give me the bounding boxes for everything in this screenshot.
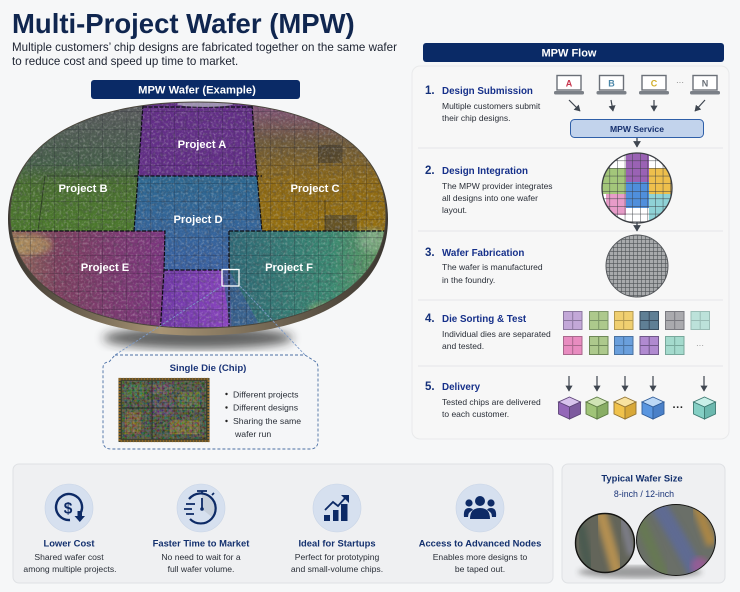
step 4 text: and tested. (442, 341, 484, 351)
region: Project F (229, 231, 384, 326)
step 3 text: 3. (425, 247, 435, 259)
step 2 wafer layout (600, 150, 675, 226)
die highlight square (222, 270, 239, 286)
wafer illustration (0, 95, 400, 349)
panel: typical wafer size: Typical Wafer Size (601, 472, 683, 484)
step 1 laptops: C (651, 78, 658, 88)
title: Multi-Project Wafer (MPW) (12, 8, 355, 39)
benefit: startups: Perfect for prototyping (295, 552, 379, 562)
benefit: faster time (153, 484, 249, 574)
benefit: faster time: Faster Time to Market (153, 538, 249, 548)
step 1 laptops (554, 76, 720, 94)
step 4 text: 4. (425, 313, 435, 325)
icon: dollar: $ (64, 500, 73, 518)
region: Project B (10, 106, 142, 231)
labels on wafer: Project E (81, 262, 130, 274)
die photo (118, 378, 210, 442)
labels on wafer: Project D (173, 214, 223, 226)
step 5 text: Tested chips are delivered (442, 397, 541, 407)
step 4 dies: ··· (696, 341, 704, 350)
step 1 laptops: B (608, 78, 615, 88)
step 1 text: their chip designs. (442, 113, 511, 123)
step 2 text: The MPW provider integrates (442, 181, 553, 191)
subtitle: Multiple customers’ chip designs are fabricated together on the same wafer (12, 41, 397, 54)
benefit: startups (291, 484, 383, 574)
benefit: lower cost: among multiple projects. (23, 564, 117, 574)
step 5 arrows (569, 376, 704, 391)
labels on wafer (58, 139, 340, 274)
step 3 text (425, 247, 543, 285)
benefit: lower cost: Lower Cost (43, 538, 95, 548)
icon: stopwatch (177, 484, 225, 532)
step 5 text (425, 381, 541, 419)
step 3 text: The wafer is manufactured (442, 262, 543, 272)
benefit: lower cost (23, 484, 117, 574)
step 3 wafer (604, 233, 670, 299)
heading: MPW Wafer: MPW Wafer (Example) (138, 84, 256, 96)
benefit: advanced nodes: be taped out. (455, 564, 505, 574)
benefit: faster time: No need to wait for a (161, 552, 241, 562)
benefit: advanced nodes: Enables more designs to (433, 552, 528, 562)
panel: typical wafer size (562, 464, 725, 583)
step 2 text (425, 165, 553, 215)
step 1 laptops: ··· (676, 78, 684, 87)
heading: MPW Flow (423, 43, 724, 62)
benefit: faster time: full wafer volume. (168, 564, 234, 574)
step 4 text (425, 313, 551, 351)
region: Project E (12, 231, 165, 326)
icon: bar chart (313, 484, 361, 532)
region: Project D (134, 176, 262, 270)
step 2 text: layout. (442, 205, 467, 215)
region: lower centre die group (161, 270, 232, 328)
step 1 laptops: N (702, 78, 708, 88)
step 4 dies (564, 312, 710, 354)
step 4 text: Die Sorting & Test (442, 314, 527, 325)
icon: people (456, 484, 504, 532)
bullet list: wafer run (234, 429, 271, 439)
labels on wafer: Project C (290, 183, 340, 195)
benefit: lower cost: Shared wafer cost (34, 552, 104, 562)
subtitle: to reduce cost and speed up time to market. (12, 55, 238, 68)
step 5 cubes (558, 397, 716, 419)
step 3 text: Wafer Fabrication (442, 248, 524, 259)
arrow (636, 138, 638, 147)
step 4 text: Individual dies are separated (442, 329, 551, 339)
bullet list (225, 390, 301, 439)
region: Project C (252, 106, 386, 231)
heading: MPW Flow: MPW Flow (542, 48, 597, 60)
callout: single die (103, 355, 318, 449)
benefit: advanced nodes (419, 484, 541, 574)
labels on wafer: Project A (178, 139, 226, 151)
12-inch wafer (636, 500, 716, 580)
bullet list: Sharing the same (233, 416, 301, 426)
panel: typical wafer size: 8-inch / 12-inch (614, 489, 674, 499)
step 1 laptops: A (566, 78, 573, 88)
benefit: startups: Ideal for Startups (298, 538, 376, 548)
step 2 text: all designs into one wafer (442, 193, 538, 203)
bullet list: Different projects (233, 390, 299, 400)
step 1 text: Design Submission (442, 86, 533, 97)
step 5 cubes: ··· (672, 402, 684, 414)
step 1 text (425, 85, 541, 123)
step 5 text: to each customer. (442, 409, 509, 419)
benefit: startups: and small-volume chips. (291, 564, 383, 574)
step 5 text: Delivery (442, 382, 481, 393)
step 2 text: Design Integration (442, 166, 528, 177)
heading: MPW Wafer (91, 80, 300, 99)
region: Project A (138, 95, 257, 176)
labels on wafer: Project F (265, 262, 313, 274)
benefit: advanced nodes: Access to Advanced Nodes (419, 538, 541, 548)
arrow (636, 222, 638, 231)
step 1 arrows (569, 100, 705, 111)
panel: MPW flow (412, 66, 729, 439)
step 1 text: 1. (425, 85, 435, 97)
callout leader lines (115, 286, 305, 355)
bullet list: Different designs (233, 402, 299, 412)
step 5 text: 5. (425, 381, 435, 393)
panel: benefits (13, 464, 553, 583)
8-inch wafer (575, 510, 635, 575)
callout heading: Single Die (Chip) (170, 363, 246, 374)
MPW Service box (570, 120, 704, 138)
step 1 text: Multiple customers submit (442, 101, 541, 111)
step 3 text: in the foundry. (442, 275, 495, 285)
MPW Service box: MPW Service (610, 124, 664, 134)
step 2 text: 2. (425, 165, 435, 177)
labels on wafer: Project B (58, 183, 108, 195)
